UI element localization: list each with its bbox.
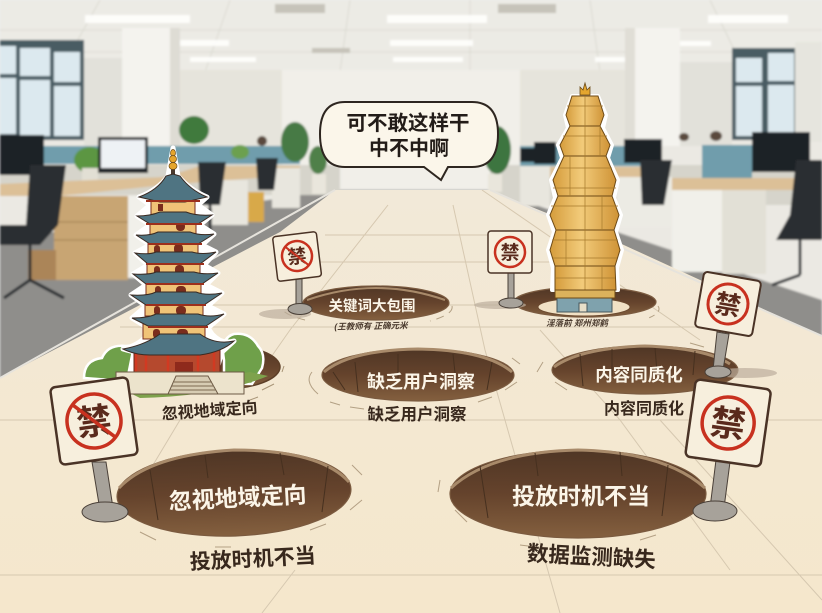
illustration: modern tower [548, 83, 622, 312]
sign: large right [685, 379, 771, 521]
pit label: 内容同质化 [595, 365, 683, 385]
desks [0, 166, 300, 196]
caption: regional pit: 忽视地域定向 [161, 398, 258, 423]
tower brick lines [551, 96, 618, 290]
red eaves [146, 201, 208, 327]
pit label: 关键词大包围 [328, 297, 416, 315]
sign: right upper [695, 271, 777, 378]
base hall [116, 334, 244, 394]
speech bubble [320, 102, 498, 180]
pagoda halo [123, 148, 234, 372]
tower halo [548, 96, 622, 290]
caption: data monitoring: 数据监测缺失 [526, 542, 657, 572]
speech bubble: 中不中啊 [369, 137, 449, 160]
sign: right upper: 禁 [712, 288, 743, 322]
spire [169, 150, 177, 174]
sign: top centre [259, 231, 322, 319]
shrubs [84, 334, 263, 384]
caption: user insight: 缺乏用户洞察 [368, 404, 467, 424]
caption: homogenisation: 内容同质化 [604, 399, 684, 418]
tower tiers [550, 96, 620, 290]
tier roofs [131, 174, 224, 326]
tower podium [557, 298, 612, 312]
caption: timing: 投放时机不当 [189, 545, 316, 574]
chairs [0, 158, 822, 245]
pit: top right under tower [514, 287, 659, 319]
pit label: 投放时机不当 [512, 483, 650, 509]
pit: ignoring regional targeting [108, 446, 362, 547]
sign: large left: 禁 [74, 401, 114, 444]
sign: large right: 禁 [708, 403, 748, 446]
grass base [128, 372, 268, 398]
sign: top right: 禁 [500, 242, 520, 264]
caption: tower pit: 淫落前 郑州郑鹤 [546, 318, 609, 328]
sign: top right [474, 231, 532, 309]
pit label: 忽视地域定向 [168, 481, 307, 515]
pit: lack of user insight [309, 349, 520, 409]
tier doors [153, 204, 188, 338]
illustration: traditional pagoda [84, 148, 268, 398]
tier walls [143, 198, 205, 339]
sign: top centre: 禁 [286, 245, 308, 269]
pit: behind pagoda [164, 345, 284, 400]
bubble text: 可不敢这样干 [346, 111, 470, 135]
floor aisle [0, 190, 822, 613]
pit: bad timing [438, 450, 706, 547]
tower top [580, 83, 590, 95]
caption: keyword pit: (王教师有 正确元米 [334, 320, 409, 332]
pit label: 缺乏用户洞察 [367, 371, 475, 392]
pit: keyword stuffing [281, 286, 452, 321]
monitors [0, 132, 810, 175]
plants [74, 147, 106, 173]
pit: content homogenisation [537, 343, 738, 394]
carpet floor areas [0, 190, 822, 613]
sign: large left [50, 377, 138, 522]
back partitions [42, 146, 300, 164]
